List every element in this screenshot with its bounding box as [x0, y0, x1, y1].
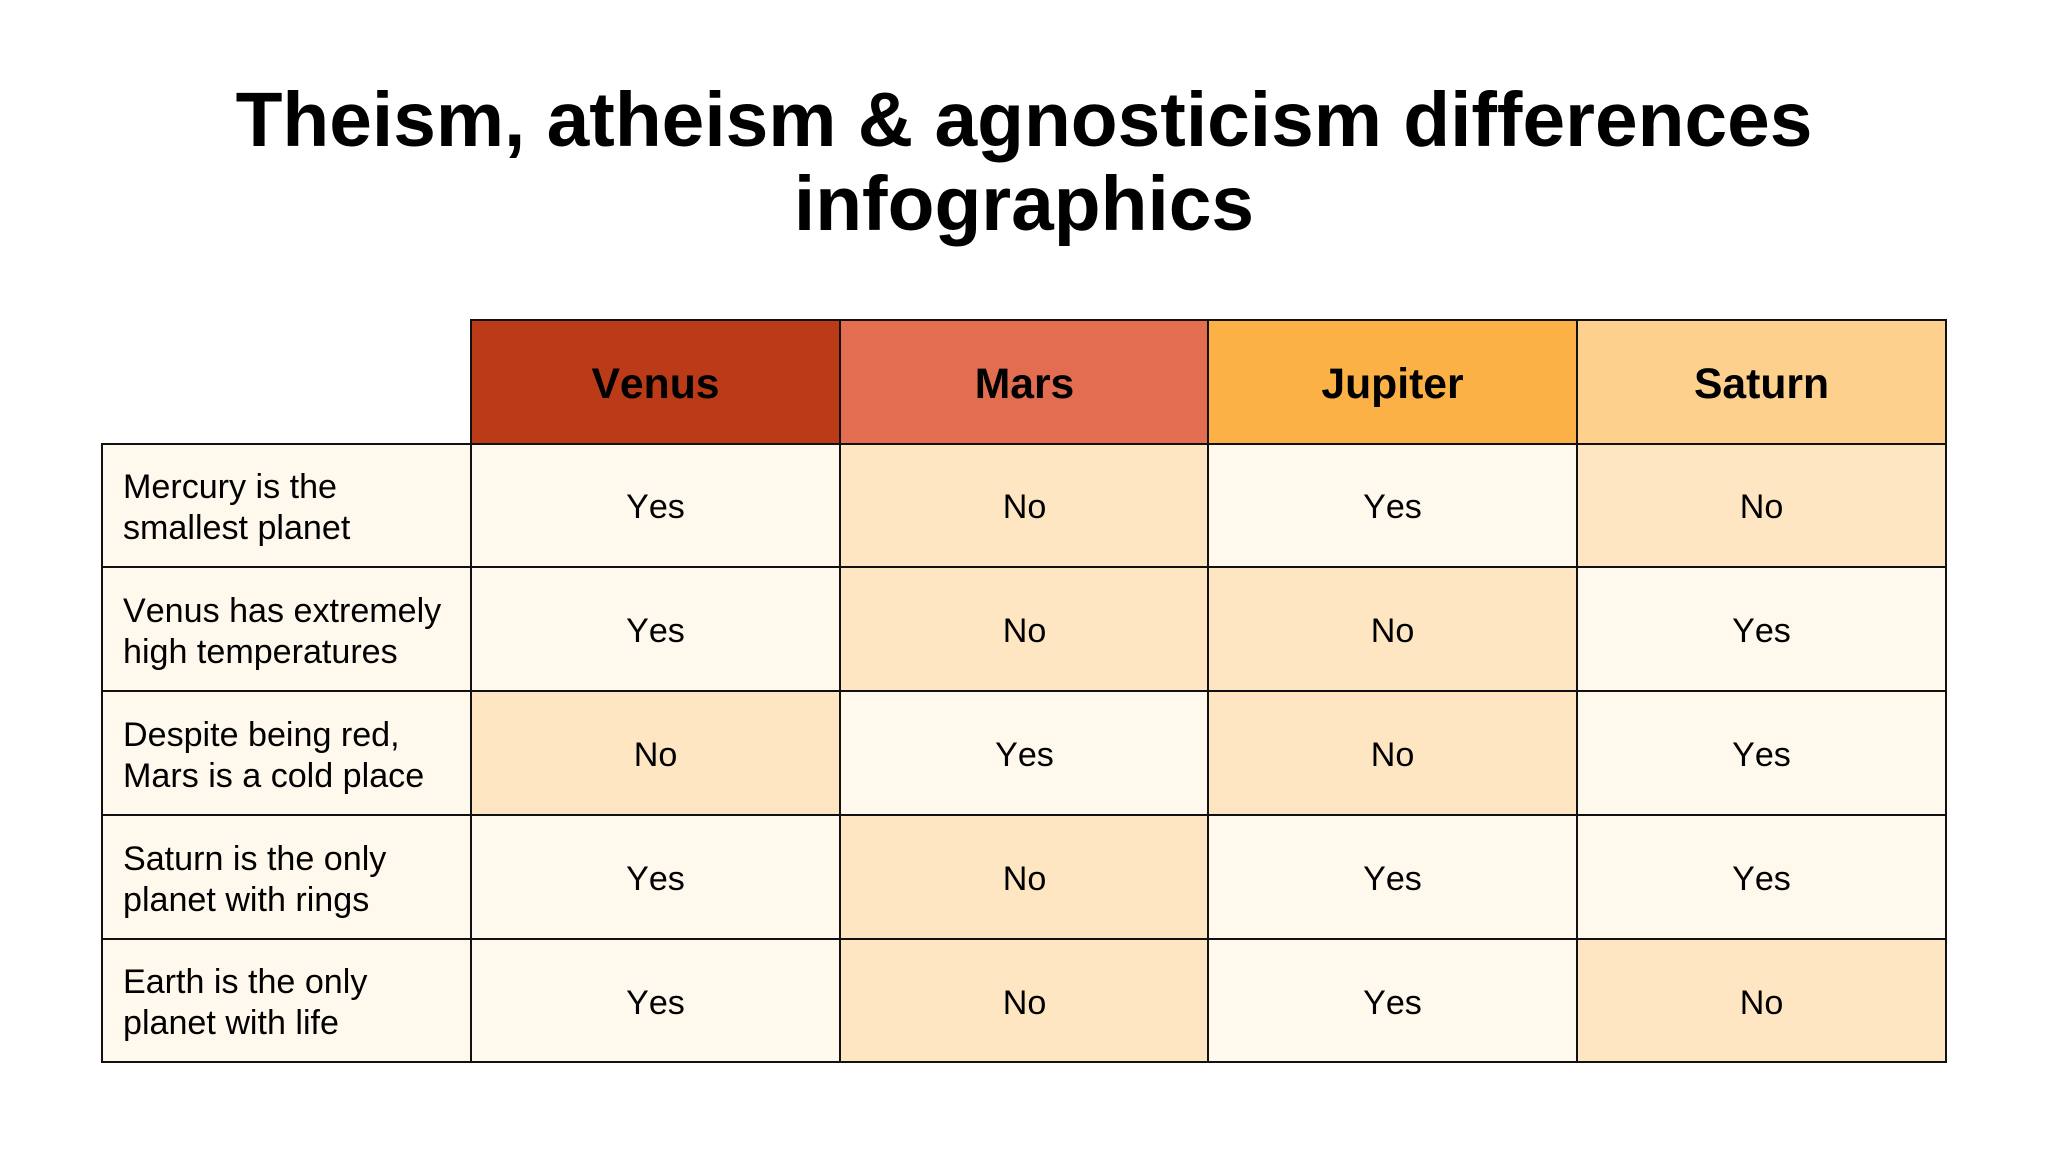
row label: Saturn — [101, 814, 472, 940]
row label: Mars — [101, 690, 472, 816]
cell — [470, 566, 841, 692]
cell — [1576, 690, 1947, 816]
row label: Saturn: Saturn is the only — [123, 840, 386, 878]
cell: Yes — [626, 488, 685, 526]
cell: Yes — [626, 984, 685, 1022]
column header: Venus — [470, 319, 841, 445]
cell — [1207, 443, 1578, 568]
title: infographics — [794, 162, 1254, 246]
row label: Earth: planet with life — [123, 1004, 339, 1042]
row label: Venus: Venus has extremely — [123, 592, 441, 630]
cell — [1207, 814, 1578, 940]
cell — [1207, 566, 1578, 692]
title: Theism, atheism & agnosticism differences — [236, 78, 1812, 163]
column header: Saturn: Saturn — [1694, 360, 1829, 408]
row label: Venus — [101, 566, 472, 692]
cell — [1576, 814, 1947, 940]
column header: Mars — [839, 319, 1210, 445]
cell — [839, 814, 1210, 940]
cell: Yes — [1363, 860, 1422, 898]
row label: Mercury — [101, 443, 472, 568]
row label: Earth — [101, 938, 472, 1063]
cell — [839, 566, 1210, 692]
cell: Yes — [626, 612, 685, 650]
cell — [1576, 566, 1947, 692]
cell: Yes — [1363, 488, 1422, 526]
row label: Mercury: Mercury is the — [123, 468, 337, 506]
cell — [470, 690, 841, 816]
cell — [839, 690, 1210, 816]
row label: Mars: Mars is a cold place — [123, 756, 424, 794]
cell: Yes — [1732, 860, 1791, 898]
column header: Mars: Mars — [975, 360, 1074, 408]
cell — [470, 938, 841, 1063]
column header: Venus: Venus — [591, 360, 720, 408]
cell: Yes — [626, 860, 685, 898]
row label: Earth: Earth is the only — [123, 963, 367, 1001]
cell: No — [1371, 736, 1414, 774]
cell — [470, 814, 841, 940]
cell: No — [1371, 612, 1414, 650]
cell: No — [1740, 984, 1783, 1022]
column header: Jupiter: Jupiter — [1321, 360, 1464, 408]
cell: Yes — [995, 736, 1054, 774]
cell: Yes — [1363, 984, 1422, 1022]
cell: Yes — [1732, 612, 1791, 650]
cell — [839, 938, 1210, 1063]
cell: Yes — [1732, 736, 1791, 774]
cell — [470, 443, 841, 568]
cell: No — [634, 736, 677, 774]
cell: No — [1740, 488, 1783, 526]
column header: Saturn — [1576, 319, 1947, 445]
cell — [839, 443, 1210, 568]
row label: Saturn: planet with rings — [123, 880, 369, 918]
cell: No — [1003, 612, 1046, 650]
title — [236, 78, 1812, 246]
cell — [1576, 938, 1947, 1063]
row label: Venus: high temperatures — [123, 632, 398, 670]
column header: Jupiter — [1207, 319, 1578, 445]
cell: No — [1003, 860, 1046, 898]
cell — [1576, 443, 1947, 568]
cell: No — [1003, 984, 1046, 1022]
cell: No — [1003, 488, 1046, 526]
cell — [1207, 938, 1578, 1063]
row label: Mercury: smallest planet — [123, 508, 350, 546]
row label: Mars: Despite being red, — [123, 716, 400, 754]
cell — [1207, 690, 1578, 816]
